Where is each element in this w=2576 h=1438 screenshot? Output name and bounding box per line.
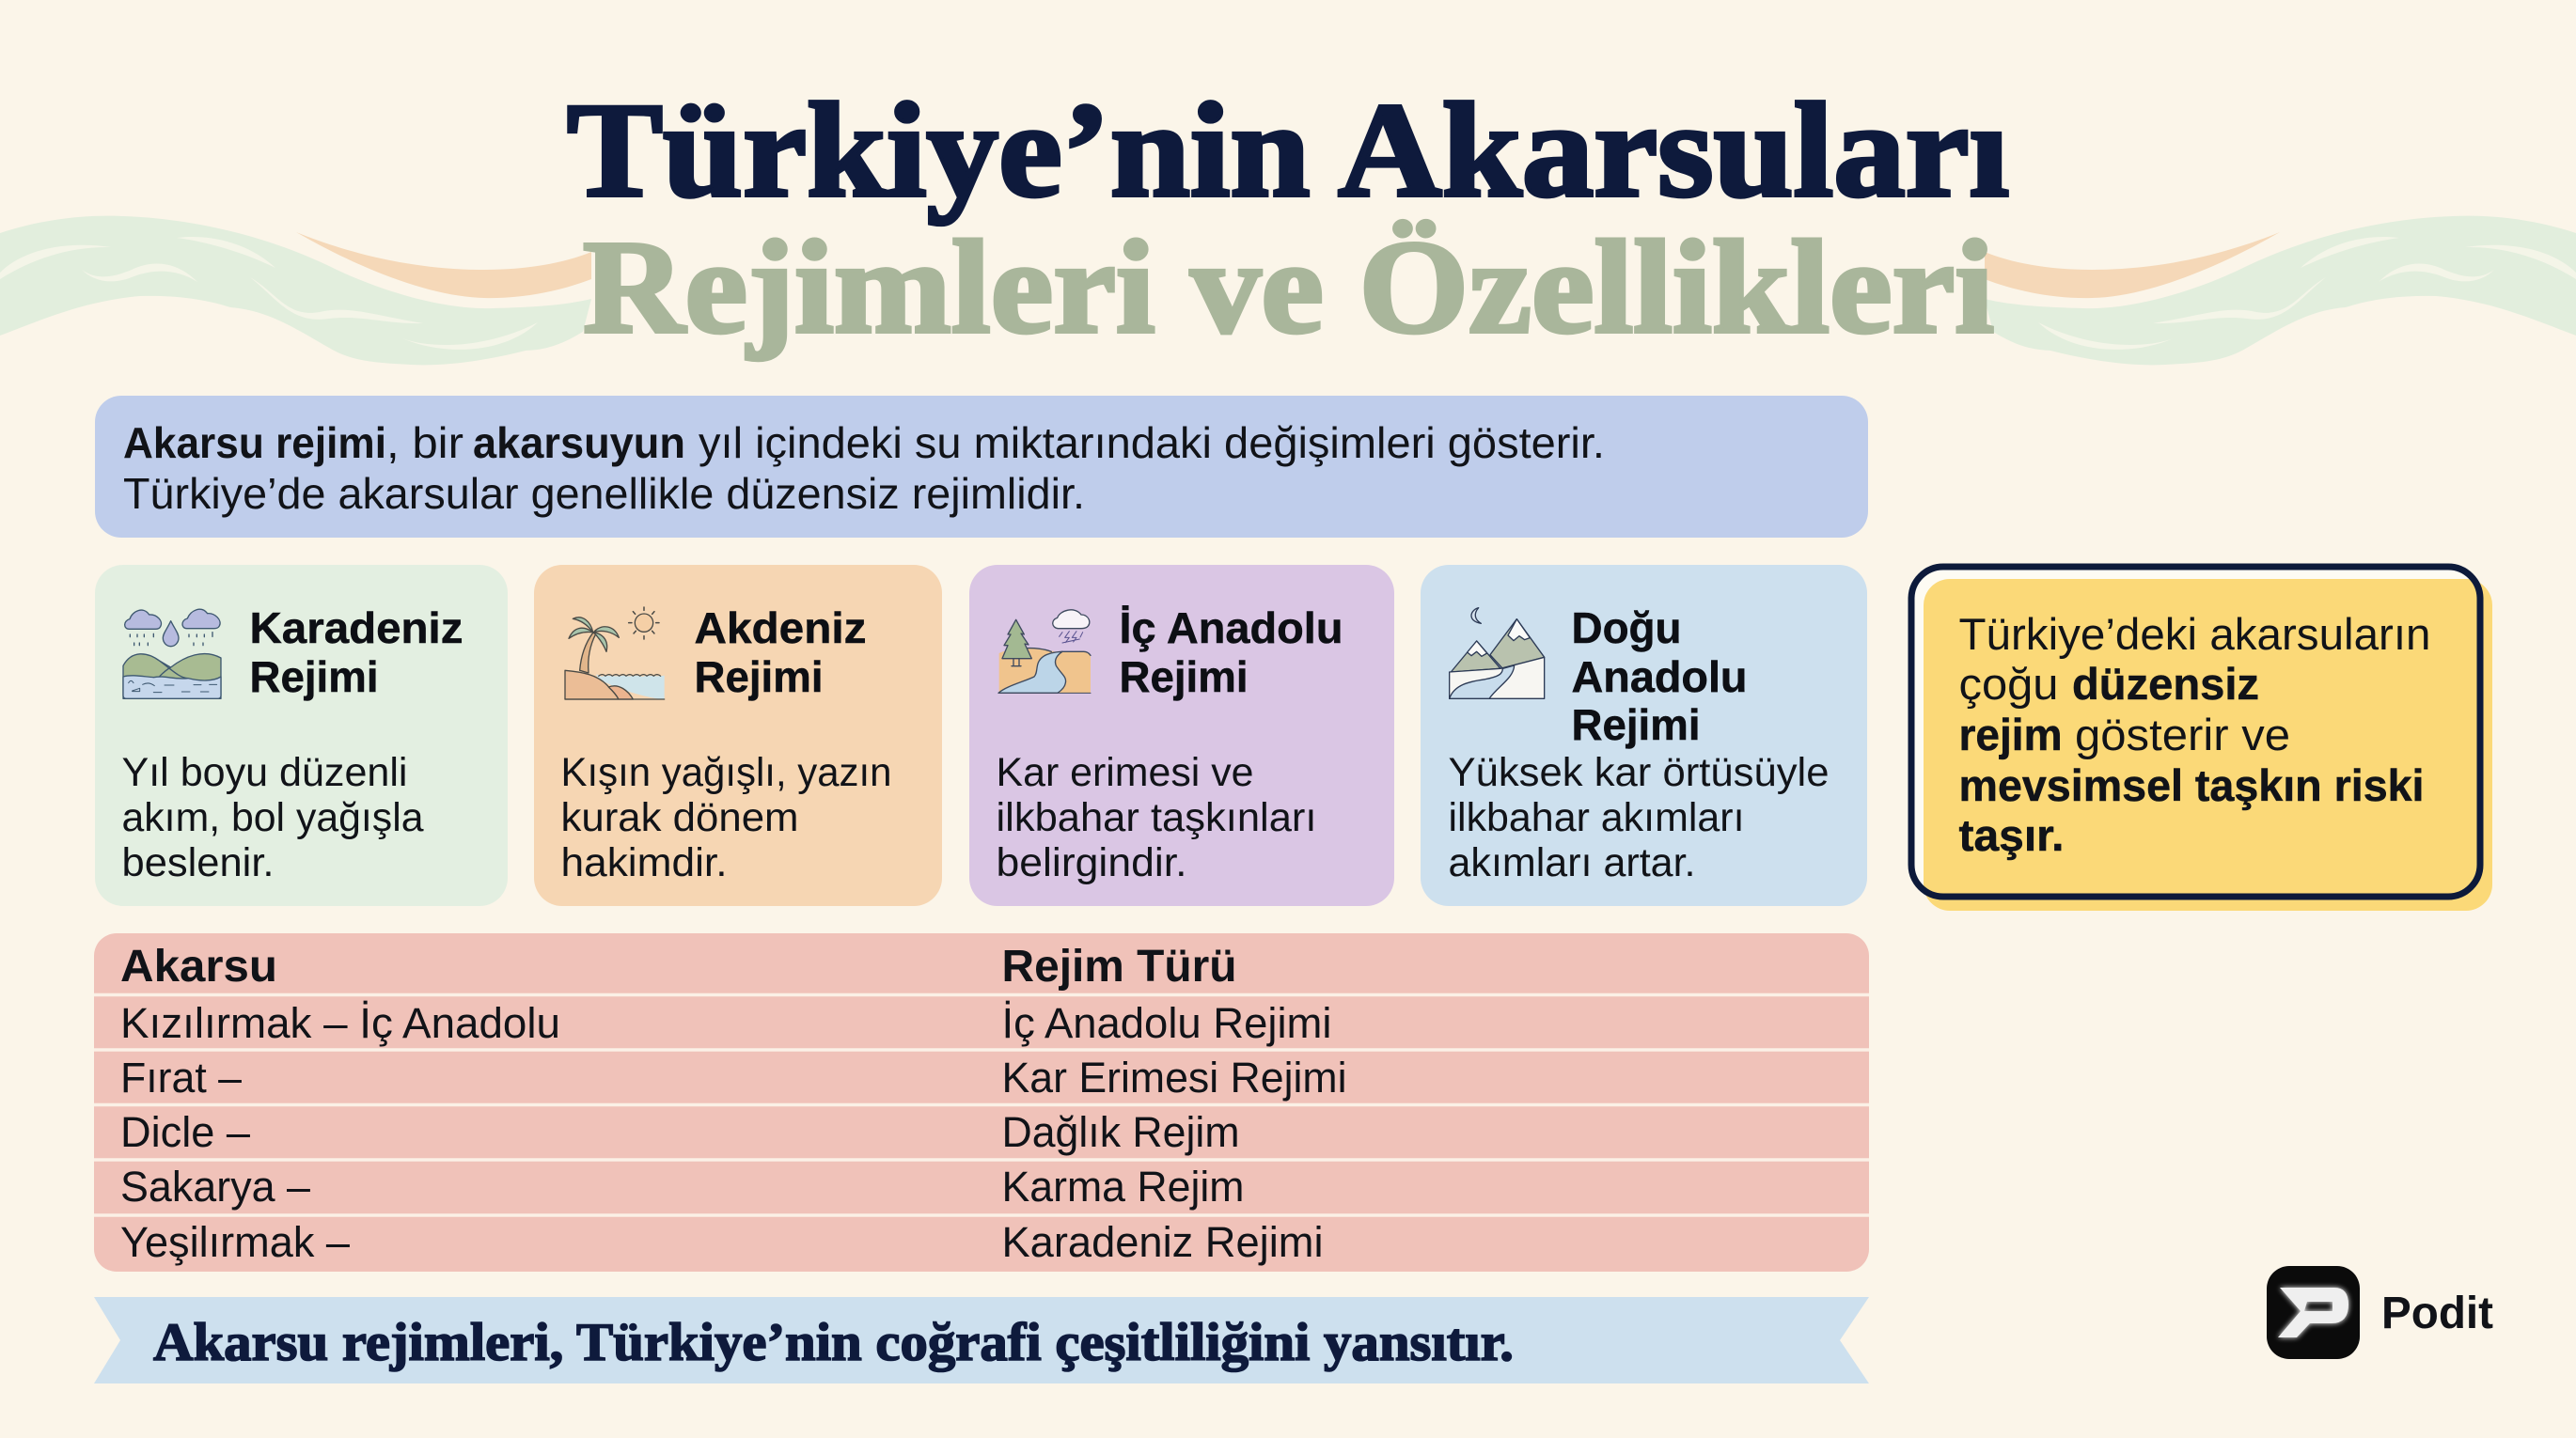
icon: tree, river and storm cloud: [998, 610, 1091, 693]
description: hakimdir.: [560, 840, 728, 885]
table column: rivers: Fırat –: [120, 1054, 242, 1102]
table column: regime types: Kar Erimesi Rejimi: [1002, 1054, 1346, 1102]
title: Türkiye’nin Akarsuları: [567, 76, 2009, 226]
intro panel: yıl içindeki su miktarındaki değişimleri gösterir.: [699, 418, 1605, 467]
description: [560, 750, 891, 885]
heading: İç Anadolu: [1119, 603, 1343, 652]
logo: Podit: Podit: [2381, 1289, 2493, 1338]
panel: Doğu Anadolu Rejimi: [1421, 565, 1867, 906]
description: belirgindir.: [997, 840, 1186, 885]
title: Rejimleri ve Özellikleri: [583, 212, 1994, 361]
heading: Rejimi: [1572, 700, 1700, 749]
callout: yellow note: taşır.: [1959, 810, 2065, 860]
heading: Rejimi: [694, 652, 824, 701]
intro panel: Türkiye’de akarsular genellikle düzensiz rejimlidir.: [123, 469, 1085, 518]
heading: [250, 603, 463, 701]
banner: closing statement: [94, 1297, 1869, 1383]
panel: Karadeniz Rejimi: [95, 565, 508, 906]
heading: Karadeniz: [250, 603, 463, 652]
table column: regime types: [1002, 999, 1346, 1266]
description: ilkbahar taşkınları: [997, 795, 1316, 840]
intro panel: , bir: [386, 418, 463, 467]
description: Yıl boyu düzenli: [122, 750, 408, 795]
description: ilkbahar akımları: [1448, 795, 1745, 840]
heading: Rejimi: [250, 652, 378, 701]
table: rivers and regimes: [94, 933, 1869, 1272]
callout: yellow note: [1908, 564, 2492, 911]
table column: regime types: Dağlık Rejim: [1002, 1108, 1239, 1156]
table header: Akarsu: [120, 942, 277, 992]
icon: snowy mountains and moon: [1450, 608, 1545, 698]
panel: İç Anadolu Rejimi: [969, 565, 1394, 906]
callout: yellow note: gösterir ve: [2075, 710, 2290, 759]
icon: rain clouds and hills: [123, 609, 221, 698]
heading: Rejimi: [1119, 652, 1249, 701]
description: kurak dönem: [560, 795, 799, 840]
panel: Akdeniz Rejimi: [534, 565, 942, 906]
table column: rivers: Yeşilırmak –: [120, 1218, 350, 1266]
description: beslenir.: [122, 840, 275, 885]
logo: Podit: [2267, 1266, 2493, 1359]
description: Kar erimesi ve: [997, 750, 1254, 795]
table column: regime types: Karma Rejim: [1002, 1163, 1245, 1211]
table header: Rejim Türü: [1002, 942, 1237, 992]
heading: Anadolu: [1572, 652, 1747, 701]
decorative river wave right: [1985, 216, 2576, 365]
table column: rivers: Kızılırmak – İç Anadolu: [120, 999, 560, 1047]
table column: regime types: Karadeniz Rejimi: [1002, 1218, 1324, 1266]
table column: rivers: Dicle –: [120, 1108, 250, 1156]
heading: Doğu: [1572, 603, 1681, 652]
callout: yellow note: Türkiye’deki akarsuların: [1959, 609, 2431, 659]
heading: [1119, 603, 1343, 701]
table column: rivers: Sakarya –: [120, 1163, 310, 1211]
description: [122, 750, 424, 885]
title: [567, 76, 2009, 361]
banner: closing statement: Akarsu rejimleri, Türkiye’nin coğrafi çeşitliliğini yansıtır.: [153, 1313, 1514, 1372]
description: [997, 750, 1316, 885]
table column: regime types: İç Anadolu Rejimi: [1002, 999, 1331, 1047]
heading: [694, 603, 867, 701]
description: akım, bol yağışla: [122, 795, 424, 840]
table column: rivers: [120, 999, 560, 1266]
description: akımları artar.: [1448, 840, 1696, 885]
callout: yellow note: mevsimsel taşkın riski: [1959, 760, 2424, 810]
callout: yellow note: çoğu: [1959, 659, 2059, 709]
description: Yüksek kar örtüsüyle: [1448, 750, 1830, 795]
description: Kışın yağışlı, yazın: [560, 750, 891, 795]
table header: [120, 942, 1237, 992]
decorative river wave left: [0, 216, 591, 365]
description: [1448, 750, 1830, 885]
intro panel: akarsuyun: [473, 418, 685, 467]
icon: palm island and sun: [565, 607, 665, 699]
callout: yellow note: düzensiz: [2072, 659, 2259, 709]
callout: yellow note: rejim: [1959, 710, 2063, 759]
intro panel: Akarsu rejimi: [123, 418, 386, 467]
intro panel: [95, 396, 1868, 538]
heading: [1572, 603, 1747, 749]
heading: Akdeniz: [694, 603, 867, 652]
